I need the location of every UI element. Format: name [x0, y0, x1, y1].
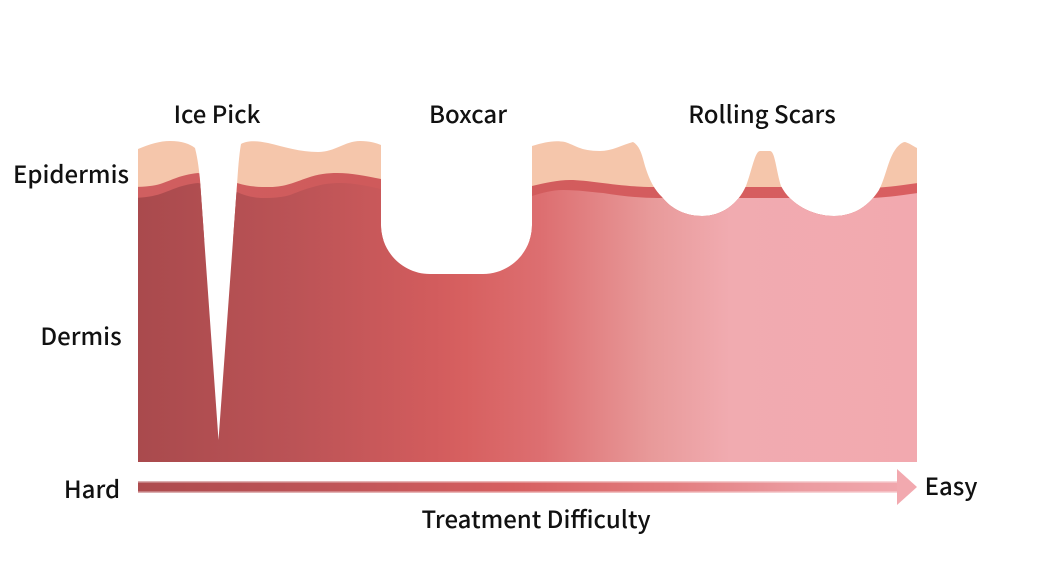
- layer: dermis: [130, 183, 925, 470]
- label: Hard: Hard: [64, 470, 120, 505]
- panel: skin cross-section: [130, 135, 925, 470]
- heading: Rolling Scars: Rolling Scars: [688, 95, 836, 130]
- label: Treatment Difficulty: Treatment Difficulty: [421, 500, 651, 535]
- label: Epidermis: Epidermis: [13, 155, 129, 190]
- layer: red band: [130, 173, 925, 240]
- label: Easy: Easy: [925, 467, 977, 502]
- heading: Ice Pick: Ice Pick: [174, 95, 261, 130]
- arrow: treatment difficulty: [138, 469, 917, 505]
- layer: epidermis: [130, 135, 925, 235]
- heading: Boxcar: Boxcar: [429, 95, 507, 130]
- bottom edge of skin: [138, 460, 917, 462]
- label: Dermis: Dermis: [40, 317, 122, 352]
